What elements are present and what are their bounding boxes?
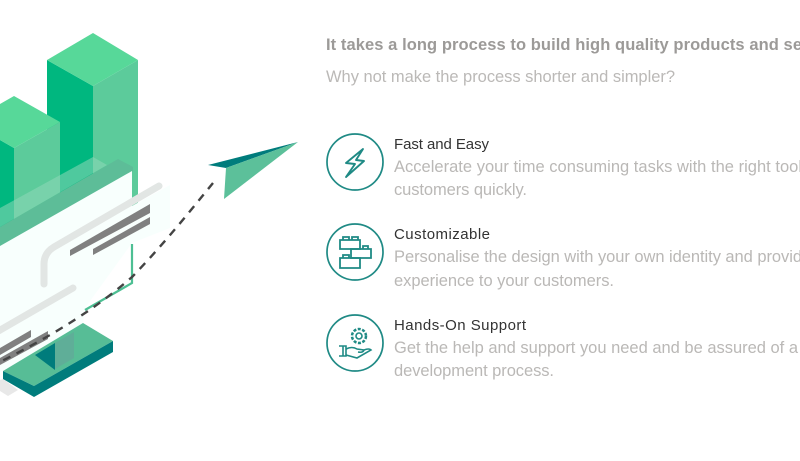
title: Customizable	[394, 226, 490, 243]
icon: building bricks	[327, 224, 383, 280]
monitor base	[3, 323, 113, 397]
feature: Hands-On Support	[327, 315, 799, 380]
screen outline	[85, 244, 132, 310]
description: Get the help and support you need and be assured of a	[394, 339, 799, 357]
monitor base shadow	[0, 379, 18, 396]
description: Accelerate your time consuming tasks with the right tool	[394, 158, 800, 176]
dashed flight path	[0, 183, 213, 364]
illustration: isometric monitor with bar chart	[0, 33, 298, 397]
title: Fast and Easy	[394, 136, 490, 153]
feature: Customizable	[327, 224, 800, 290]
title: Hands-On Support	[394, 317, 527, 334]
icon: lightning bolt	[327, 134, 383, 190]
description	[394, 158, 800, 199]
monitor screen panel	[0, 171, 170, 372]
monitor translucent top frame	[0, 157, 133, 247]
screen light grey lines	[0, 186, 159, 333]
icon: tall green bar	[47, 33, 138, 230]
subheading: Why not make the process shorter and simpler?	[326, 68, 675, 86]
heading: It takes a long process to build high quality products and se	[326, 36, 800, 54]
icon: paper plane	[208, 142, 298, 199]
feature: Fast and Easy	[327, 134, 800, 199]
description: experience to your customers.	[394, 272, 614, 290]
description	[394, 339, 799, 380]
icon: hand holding gear	[327, 315, 383, 371]
description: development process.	[394, 362, 554, 380]
icon: short green bar	[0, 96, 60, 260]
description: customers quickly.	[394, 181, 527, 199]
description	[394, 248, 800, 290]
screen dark text bars	[0, 204, 150, 365]
description: Personalise the design with your own identity and provid	[394, 248, 800, 266]
